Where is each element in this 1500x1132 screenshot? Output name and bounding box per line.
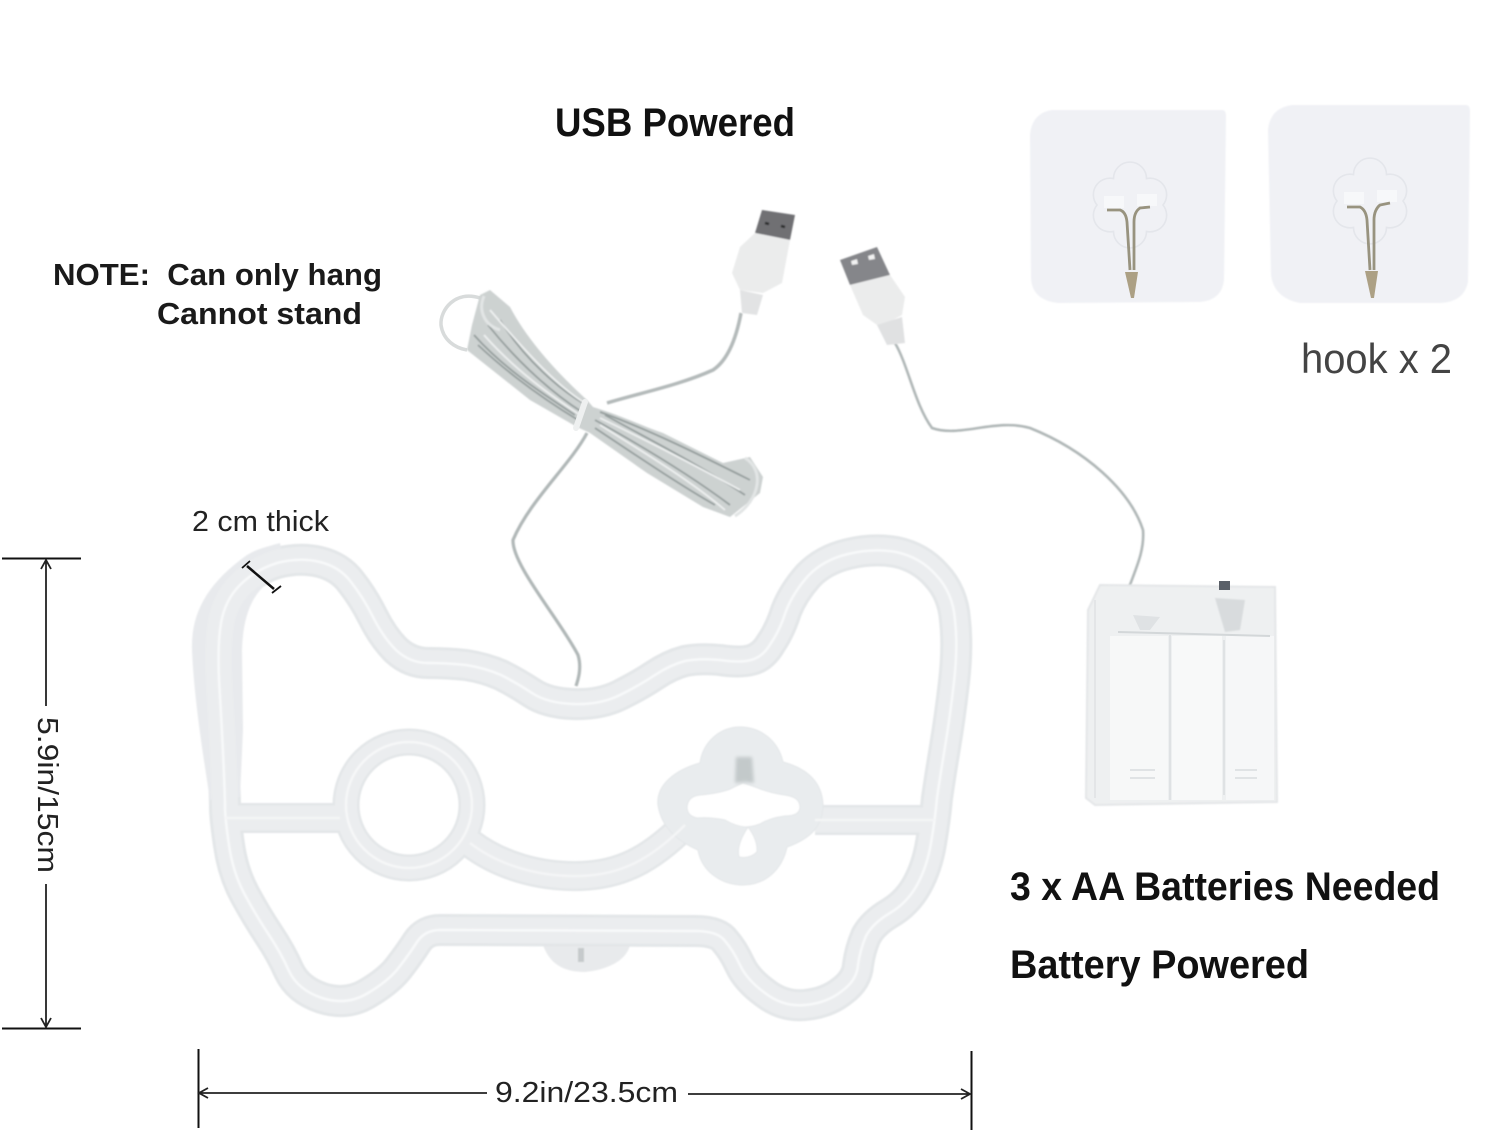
height dimension xyxy=(2,558,81,1028)
label: 2 cm thick: 2 cm thick xyxy=(192,506,330,538)
height label: 5.9in/15cm xyxy=(31,717,63,873)
tube body xyxy=(219,550,956,1005)
note: hanging only: Cannot stand xyxy=(157,296,362,331)
wider left arm xyxy=(192,543,285,800)
cable to battery box xyxy=(895,343,1143,600)
d-pad clover xyxy=(658,727,823,885)
game controller neon sign xyxy=(192,543,956,1005)
width arrow xyxy=(199,1088,970,1099)
battery box xyxy=(1086,581,1277,805)
width dimension xyxy=(198,1049,972,1130)
cable tie xyxy=(576,402,585,428)
outer tube edge xyxy=(219,550,956,1005)
wire bundle xyxy=(467,290,763,517)
cable down to sign xyxy=(513,433,587,686)
cable to plug xyxy=(607,313,741,403)
stand tab xyxy=(543,945,630,972)
coil loop xyxy=(441,296,480,350)
note: hanging only: NOTE: Can only hang xyxy=(53,257,382,292)
hook accessory pair xyxy=(1030,105,1470,303)
battery note text xyxy=(1010,865,1440,987)
label: hook x 2: hook x 2 xyxy=(1301,335,1452,382)
hook 2 xyxy=(1268,105,1470,303)
clover upper slot shadow xyxy=(735,757,754,783)
heading: USB Powered: USB Powered xyxy=(555,101,795,145)
note: hanging only xyxy=(53,257,382,331)
hook 1 xyxy=(1030,110,1226,303)
height arrow xyxy=(41,560,51,1027)
USB male plug xyxy=(732,210,795,315)
highlight seam xyxy=(219,550,956,1005)
height extension lines xyxy=(2,558,81,1028)
width label: 9.2in/23.5cm xyxy=(495,1077,678,1109)
USB female plug xyxy=(840,247,905,345)
cable bundle with USB male plug xyxy=(441,210,795,686)
width extension lines xyxy=(198,1049,972,1130)
batteries needed line: 3 x AA Batteries Needed xyxy=(1010,865,1440,909)
battery powered line: Battery Powered xyxy=(1010,943,1309,987)
USB female plug and cable to battery box xyxy=(840,247,1143,600)
thickness marker xyxy=(242,561,281,593)
